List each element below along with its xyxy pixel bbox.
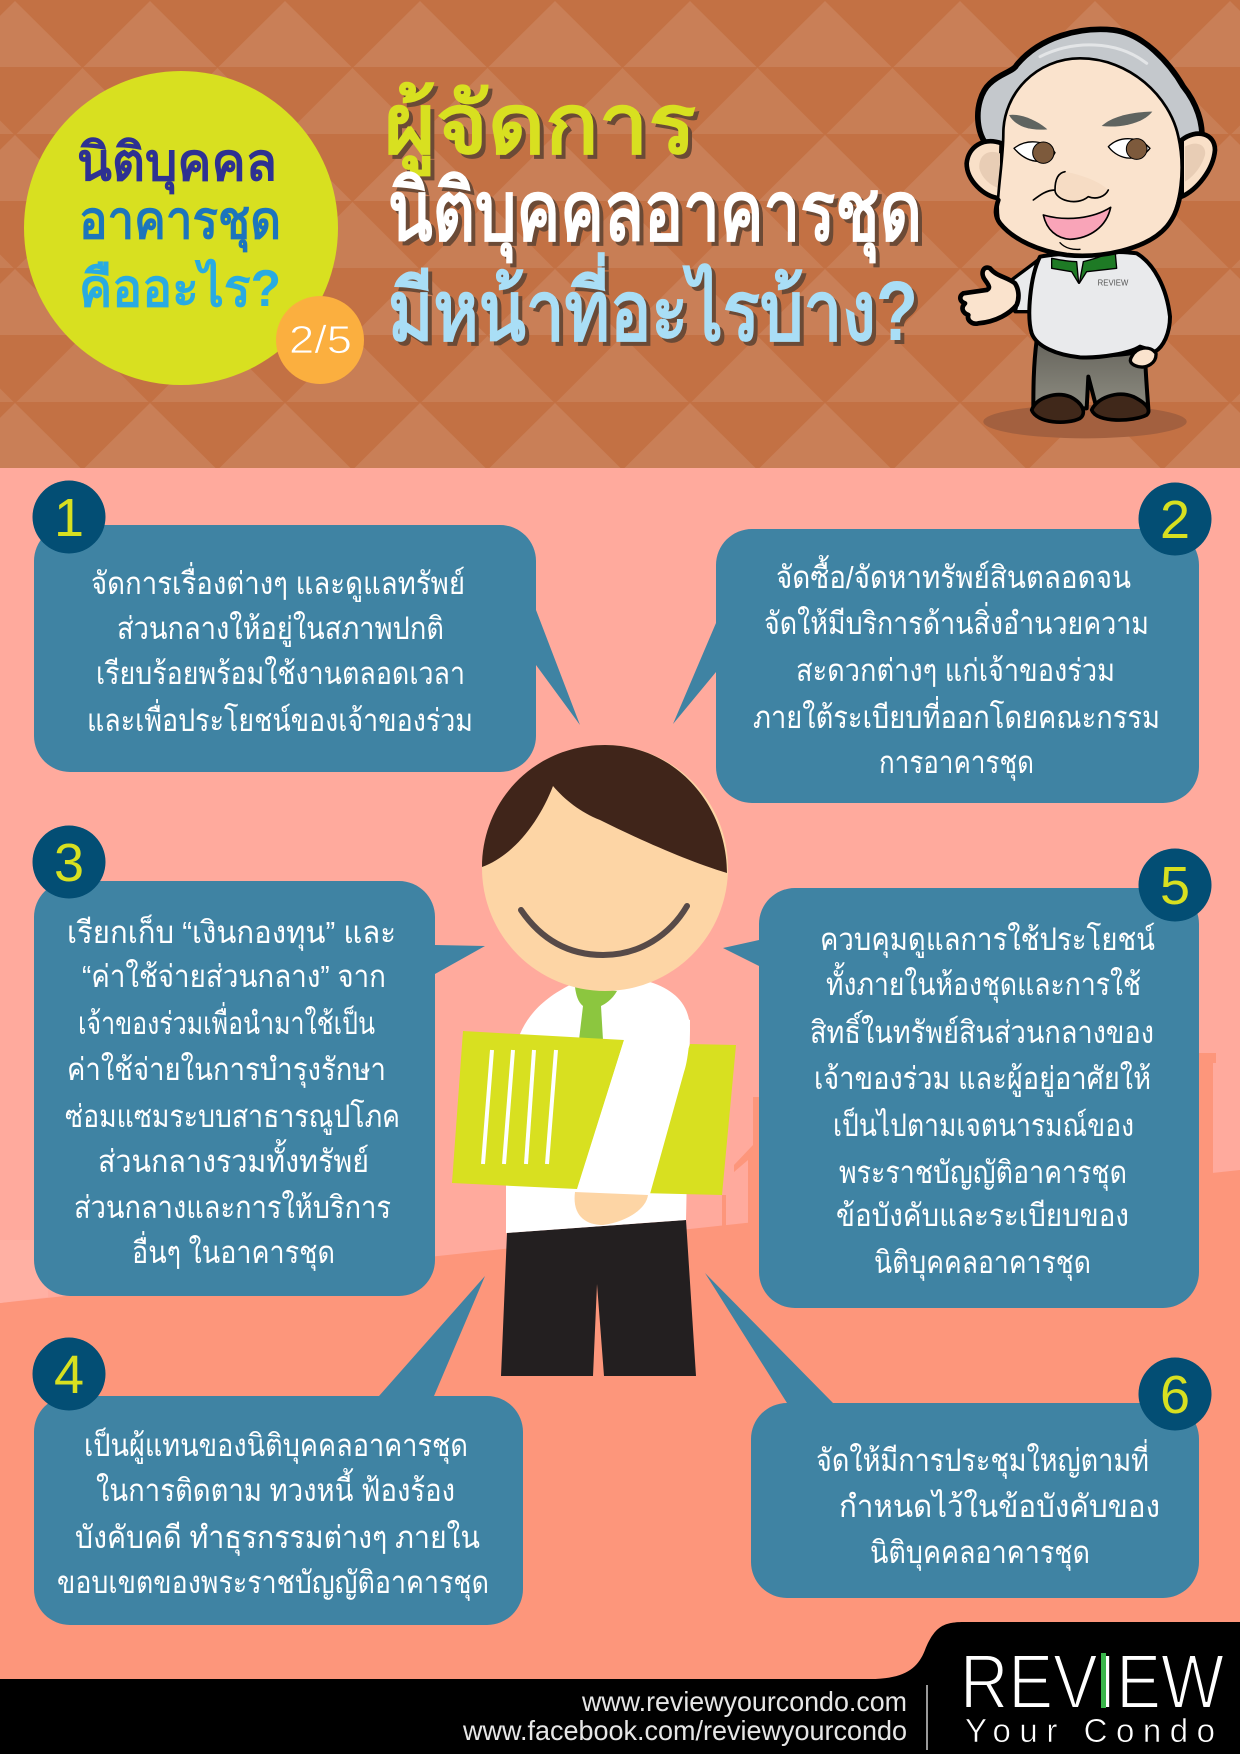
website links: www.reviewyourcondo.com xyxy=(581,1686,907,1717)
body text 5: ทั้งภายในห้องชุดและการใช้ xyxy=(826,962,1141,1004)
header band with triangle pattern xyxy=(0,0,1240,468)
central figure: smiling manager holding folder xyxy=(452,745,736,1376)
footer divider xyxy=(926,1685,928,1750)
body text 4: ขอบเขตของพระราชบัญญัติอาคารชุด xyxy=(57,1565,489,1602)
body text 1: ส่วนกลางให้อยู่ในสภาพปกติ xyxy=(117,611,444,647)
body text 6: นิติบุคคลอาคารชุด xyxy=(870,1535,1090,1572)
body text 5: สิทธิ์ในทรัพย์สินส่วนกลางของ xyxy=(810,1009,1154,1050)
body text 2: การอาคารชุด xyxy=(879,745,1034,782)
number badge 3: 3 xyxy=(54,833,84,893)
body text 3: ส่วนกลางและการให้บริการ xyxy=(74,1190,391,1225)
badge: what is a juristic person circle: คืออะไร? xyxy=(79,258,281,318)
body text 3: ส่วนกลางรวมทั้งทรัพย์ xyxy=(98,1139,369,1179)
number badge 3 xyxy=(32,826,106,898)
number badge 6 xyxy=(1138,1358,1212,1430)
body text 2: จัดให้มีบริการด้านสิ่งอำนวยความ xyxy=(764,602,1149,641)
body text 2: ภายใต้ระเบียบที่ออกโดยคณะกรรม xyxy=(753,696,1160,735)
badge: page number 2/5: 2/5 xyxy=(289,319,352,362)
number badge 5 xyxy=(1138,848,1212,922)
website links xyxy=(462,1686,907,1746)
callout 5 xyxy=(723,848,1212,1308)
page background: pink lower scene xyxy=(0,468,1240,1754)
logo REVIEW Your Condo: Your Condo xyxy=(965,1712,1215,1749)
body text 4: บังคับคดี ทำธุรกรรมต่างๆ ภายใน xyxy=(75,1520,480,1557)
callout 3 xyxy=(32,826,485,1296)
title: นิติบุคคลอาคารชุด xyxy=(392,168,926,268)
tie xyxy=(575,987,617,1040)
body text 3: ค่าใช้จ่ายในการบำรุงรักษา xyxy=(67,1052,386,1089)
mascot: old man character: REVIEW xyxy=(1098,277,1128,287)
website links: www.facebook.com/reviewyourcondo xyxy=(462,1715,907,1746)
mascot: old man character xyxy=(960,29,1215,438)
body text 6: กำหนดไว้ในข้อบังคับของ xyxy=(839,1489,1160,1524)
body text 3 xyxy=(65,914,400,1272)
speech bubble shape xyxy=(34,1276,523,1625)
number badge 1: 1 xyxy=(54,488,84,548)
body text 2: สะดวกต่างๆ แก่เจ้าของร่วม xyxy=(796,653,1115,688)
badge: page number 2/5 xyxy=(276,296,364,384)
shirt xyxy=(506,982,690,1233)
body text 5: ข้อบังคับและระเบียบของ xyxy=(836,1198,1129,1233)
badge: what is a juristic person circle xyxy=(24,71,338,385)
body text 1 xyxy=(87,562,473,738)
body text 5: เป็นไปตามเจตนารมณ์ของ xyxy=(833,1107,1134,1143)
number badge 5: 5 xyxy=(1160,856,1190,916)
body text 5: นิติบุคคลอาคารชุด xyxy=(874,1245,1091,1282)
body text 1: เรียบร้อยพร้อมใช้งานตลอดเวลา xyxy=(96,656,465,691)
callout 6 xyxy=(705,1273,1212,1598)
number badge 2 xyxy=(1138,482,1212,556)
speech bubble shape xyxy=(34,881,485,1296)
hand xyxy=(575,1192,648,1225)
title: นิติบุคคลอาคารชุด xyxy=(388,164,922,264)
speech bubble shape xyxy=(723,888,1199,1308)
number badge 4: 4 xyxy=(54,1345,84,1405)
speech bubble shape xyxy=(673,529,1199,803)
number badge 2: 2 xyxy=(1160,490,1190,550)
body text 3: อื่นๆ ในอาคารชุด xyxy=(132,1231,335,1272)
body text 2 xyxy=(753,555,1160,782)
body text 3: ซ่อมแซมระบบสาธารณูปโภค xyxy=(65,1099,400,1135)
badge: what is a juristic person circle: อาคารชุด xyxy=(79,192,281,253)
number badge 4 xyxy=(32,1338,106,1410)
folder lines xyxy=(483,1050,556,1164)
title: ผู้จัดการ xyxy=(384,77,696,177)
body text 5: พระราชบัญญัติอาคารชุด xyxy=(839,1155,1127,1192)
callout 1 xyxy=(32,480,580,772)
head xyxy=(482,745,728,991)
trousers xyxy=(501,1220,696,1376)
body text 5: ควบคุมดูแลการใช้ประโยชน์ xyxy=(820,922,1155,959)
callout 4 xyxy=(32,1276,523,1625)
body text 1: และเพื่อประโยชน์ของเจ้าของร่วม xyxy=(87,699,473,738)
body text 4 xyxy=(57,1427,489,1602)
folder front xyxy=(452,1031,624,1189)
arm sleeve xyxy=(577,1000,690,1194)
body text 1: จัดการเรื่องต่างๆ และดูแลทรัพย์ xyxy=(91,562,465,602)
body text 3: เจ้าของร่วมเพื่อนำมาใช้เป็น xyxy=(78,1002,375,1041)
body text 6 xyxy=(816,1439,1160,1572)
number badge 1 xyxy=(32,480,106,554)
title: มีหน้าที่อะไรบ้าง? xyxy=(392,256,922,362)
body text 3: “ค่าใช้จ่ายส่วนกลาง” จาก xyxy=(82,959,386,994)
body text 4: ในการติดตาม ทวงหนี้ ฟ้องร้อง xyxy=(96,1468,455,1508)
title xyxy=(384,77,926,362)
callout 2 xyxy=(673,482,1212,803)
speech bubble shape xyxy=(705,1273,1199,1598)
badge: what is a juristic person circle: นิติบุคคล xyxy=(77,134,277,195)
speech bubble shape xyxy=(34,525,580,772)
body text 5: เจ้าของร่วม และผู้อยู่อาศัยให้ xyxy=(814,1061,1151,1097)
body text 2: จัดซื้อ/จัดหาทรัพย์สินตลอดจน xyxy=(776,555,1131,595)
title: ผู้จัดการ xyxy=(388,81,700,181)
body text 5 xyxy=(810,922,1155,1282)
number badge 6: 6 xyxy=(1160,1365,1190,1425)
folder back xyxy=(640,1044,736,1195)
body text 4: เป็นผู้แทนของนิติบุคคลอาคารชุด xyxy=(84,1427,468,1465)
footer bar xyxy=(0,1622,1240,1754)
body text 6: จัดให้มีการประชุมใหญ่ตามที่ xyxy=(816,1439,1149,1480)
title: มีหน้าที่อะไรบ้าง? xyxy=(388,252,918,358)
body text 3: เรียกเก็บ “เงินกองทุน” และ xyxy=(67,914,396,952)
